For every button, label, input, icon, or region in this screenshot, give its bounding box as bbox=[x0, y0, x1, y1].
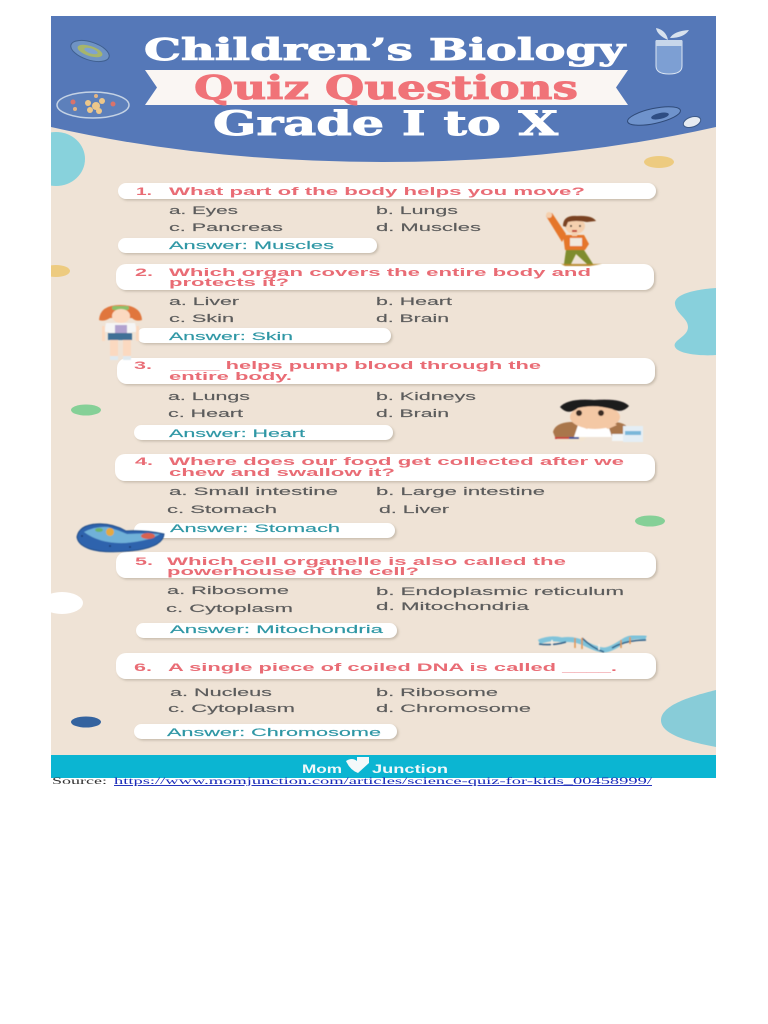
question 2 block: d. Brain bbox=[376, 313, 449, 325]
question 5 block: powerhouse of the cell? bbox=[167, 566, 420, 578]
source line bbox=[52, 776, 653, 787]
question 3 block: Answer: Heart bbox=[169, 428, 305, 440]
question 3 block: c. Heart bbox=[168, 408, 243, 420]
question 6 block: c. Cytoplasm bbox=[168, 703, 295, 715]
question 6 block: Answer: Chromosome bbox=[167, 727, 381, 739]
question 1 block: c. Pancreas bbox=[169, 222, 284, 234]
ribbon: Quiz Questions: Quiz Questions bbox=[194, 68, 578, 107]
question 4 block: d. Liver bbox=[379, 504, 450, 516]
footer bar: Junction bbox=[372, 764, 448, 776]
question 1 block: What part of the body helps you move? bbox=[169, 186, 586, 198]
question 5 block: Answer: Mitochondria bbox=[170, 624, 385, 636]
question 2 block: b. Heart bbox=[376, 296, 452, 308]
source line: https://www.momjunction.com/articles/science-quiz-for-kids_00458999/ bbox=[114, 776, 653, 787]
illustration: boy with raised arm bbox=[546, 212, 602, 266]
question 3 block: entire body. bbox=[169, 371, 292, 383]
question 1 block: Answer: Muscles bbox=[169, 240, 335, 252]
question 6 block: a. Nucleus bbox=[170, 687, 273, 699]
question 6 block: b. Ribosome bbox=[376, 687, 498, 699]
question 2 block: Answer: Skin bbox=[169, 331, 293, 343]
question 3 block bbox=[117, 358, 655, 440]
footer bar bbox=[51, 755, 716, 778]
question 1 block: a. Eyes bbox=[169, 205, 239, 217]
question 2 block: 2. bbox=[135, 267, 153, 279]
question 4 block: Where does our food get collected after we bbox=[169, 456, 624, 468]
title line: Children's Biology: Children’s Biology bbox=[144, 33, 627, 68]
illustration: boy eating bbox=[553, 400, 643, 442]
question 2 block: a. Liver bbox=[169, 296, 240, 308]
illustration: girl with organs bbox=[99, 305, 142, 360]
illustration: animal cell bbox=[77, 524, 164, 552]
question 4 block: chew and swallow it? bbox=[169, 467, 396, 479]
footer bar: Mom bbox=[302, 764, 342, 776]
icon: small cell bbox=[682, 114, 702, 130]
question 2 block: protects it? bbox=[169, 277, 290, 289]
question 3 block: d. Brain bbox=[376, 408, 449, 420]
header banner bbox=[51, 16, 716, 162]
question 4 block: a. Small intestine bbox=[169, 486, 338, 498]
question 6 block bbox=[116, 653, 656, 739]
question 3 block: ____ helps pump blood through the bbox=[169, 360, 541, 372]
source line: Source: bbox=[52, 777, 107, 787]
question 6 block: 6. bbox=[134, 662, 152, 674]
question 5 block bbox=[116, 552, 656, 638]
icon: cell top left bbox=[68, 36, 112, 66]
question 5 block: d. Mitochondria bbox=[376, 601, 531, 613]
icon: petri dish bbox=[57, 92, 129, 118]
icon: heart logo bbox=[346, 757, 369, 773]
icon: test tube with plant bbox=[656, 28, 689, 74]
question 5 block: b. Endoplasmic reticulum bbox=[376, 586, 624, 598]
question 4 block: b. Large intestine bbox=[376, 486, 545, 498]
question 2 block bbox=[116, 264, 654, 343]
question 3 block: 3. bbox=[134, 360, 152, 372]
ribbon: Quiz Questions bbox=[145, 68, 628, 107]
question 1 block: d. Muscles bbox=[376, 222, 482, 234]
question 1 block: b. Lungs bbox=[376, 205, 459, 217]
illustration: DNA strand bbox=[539, 637, 646, 652]
question 2 block: Which organ covers the entire body and bbox=[169, 267, 591, 279]
question 5 block: 5. bbox=[135, 556, 153, 568]
question 4 block: 4. bbox=[135, 456, 153, 468]
infographic background panel bbox=[51, 16, 716, 778]
question 1 block: 1. bbox=[136, 186, 152, 198]
title line: Grade I to X: Grade I to X bbox=[213, 104, 559, 144]
question 2 block: c. Skin bbox=[169, 313, 234, 325]
question 6 block: A single piece of coiled DNA is called ____. bbox=[168, 662, 617, 674]
question 6 block: d. Chromosome bbox=[376, 703, 531, 715]
question 3 block: b. Kidneys bbox=[376, 391, 477, 403]
question 1 block bbox=[118, 183, 656, 253]
decorative blobs bbox=[27, 132, 716, 747]
question 5 block: c. Cytoplasm bbox=[166, 603, 293, 615]
question 4 block: c. Stomach bbox=[167, 504, 277, 516]
icon: cell right bbox=[626, 103, 682, 129]
question 3 block: a. Lungs bbox=[168, 391, 251, 403]
question 4 block bbox=[115, 454, 655, 538]
question 5 block: Which cell organelle is also called the bbox=[167, 556, 566, 568]
question 5 block: a. Ribosome bbox=[167, 585, 289, 597]
question 4 block: Answer: Stomach bbox=[170, 523, 340, 535]
